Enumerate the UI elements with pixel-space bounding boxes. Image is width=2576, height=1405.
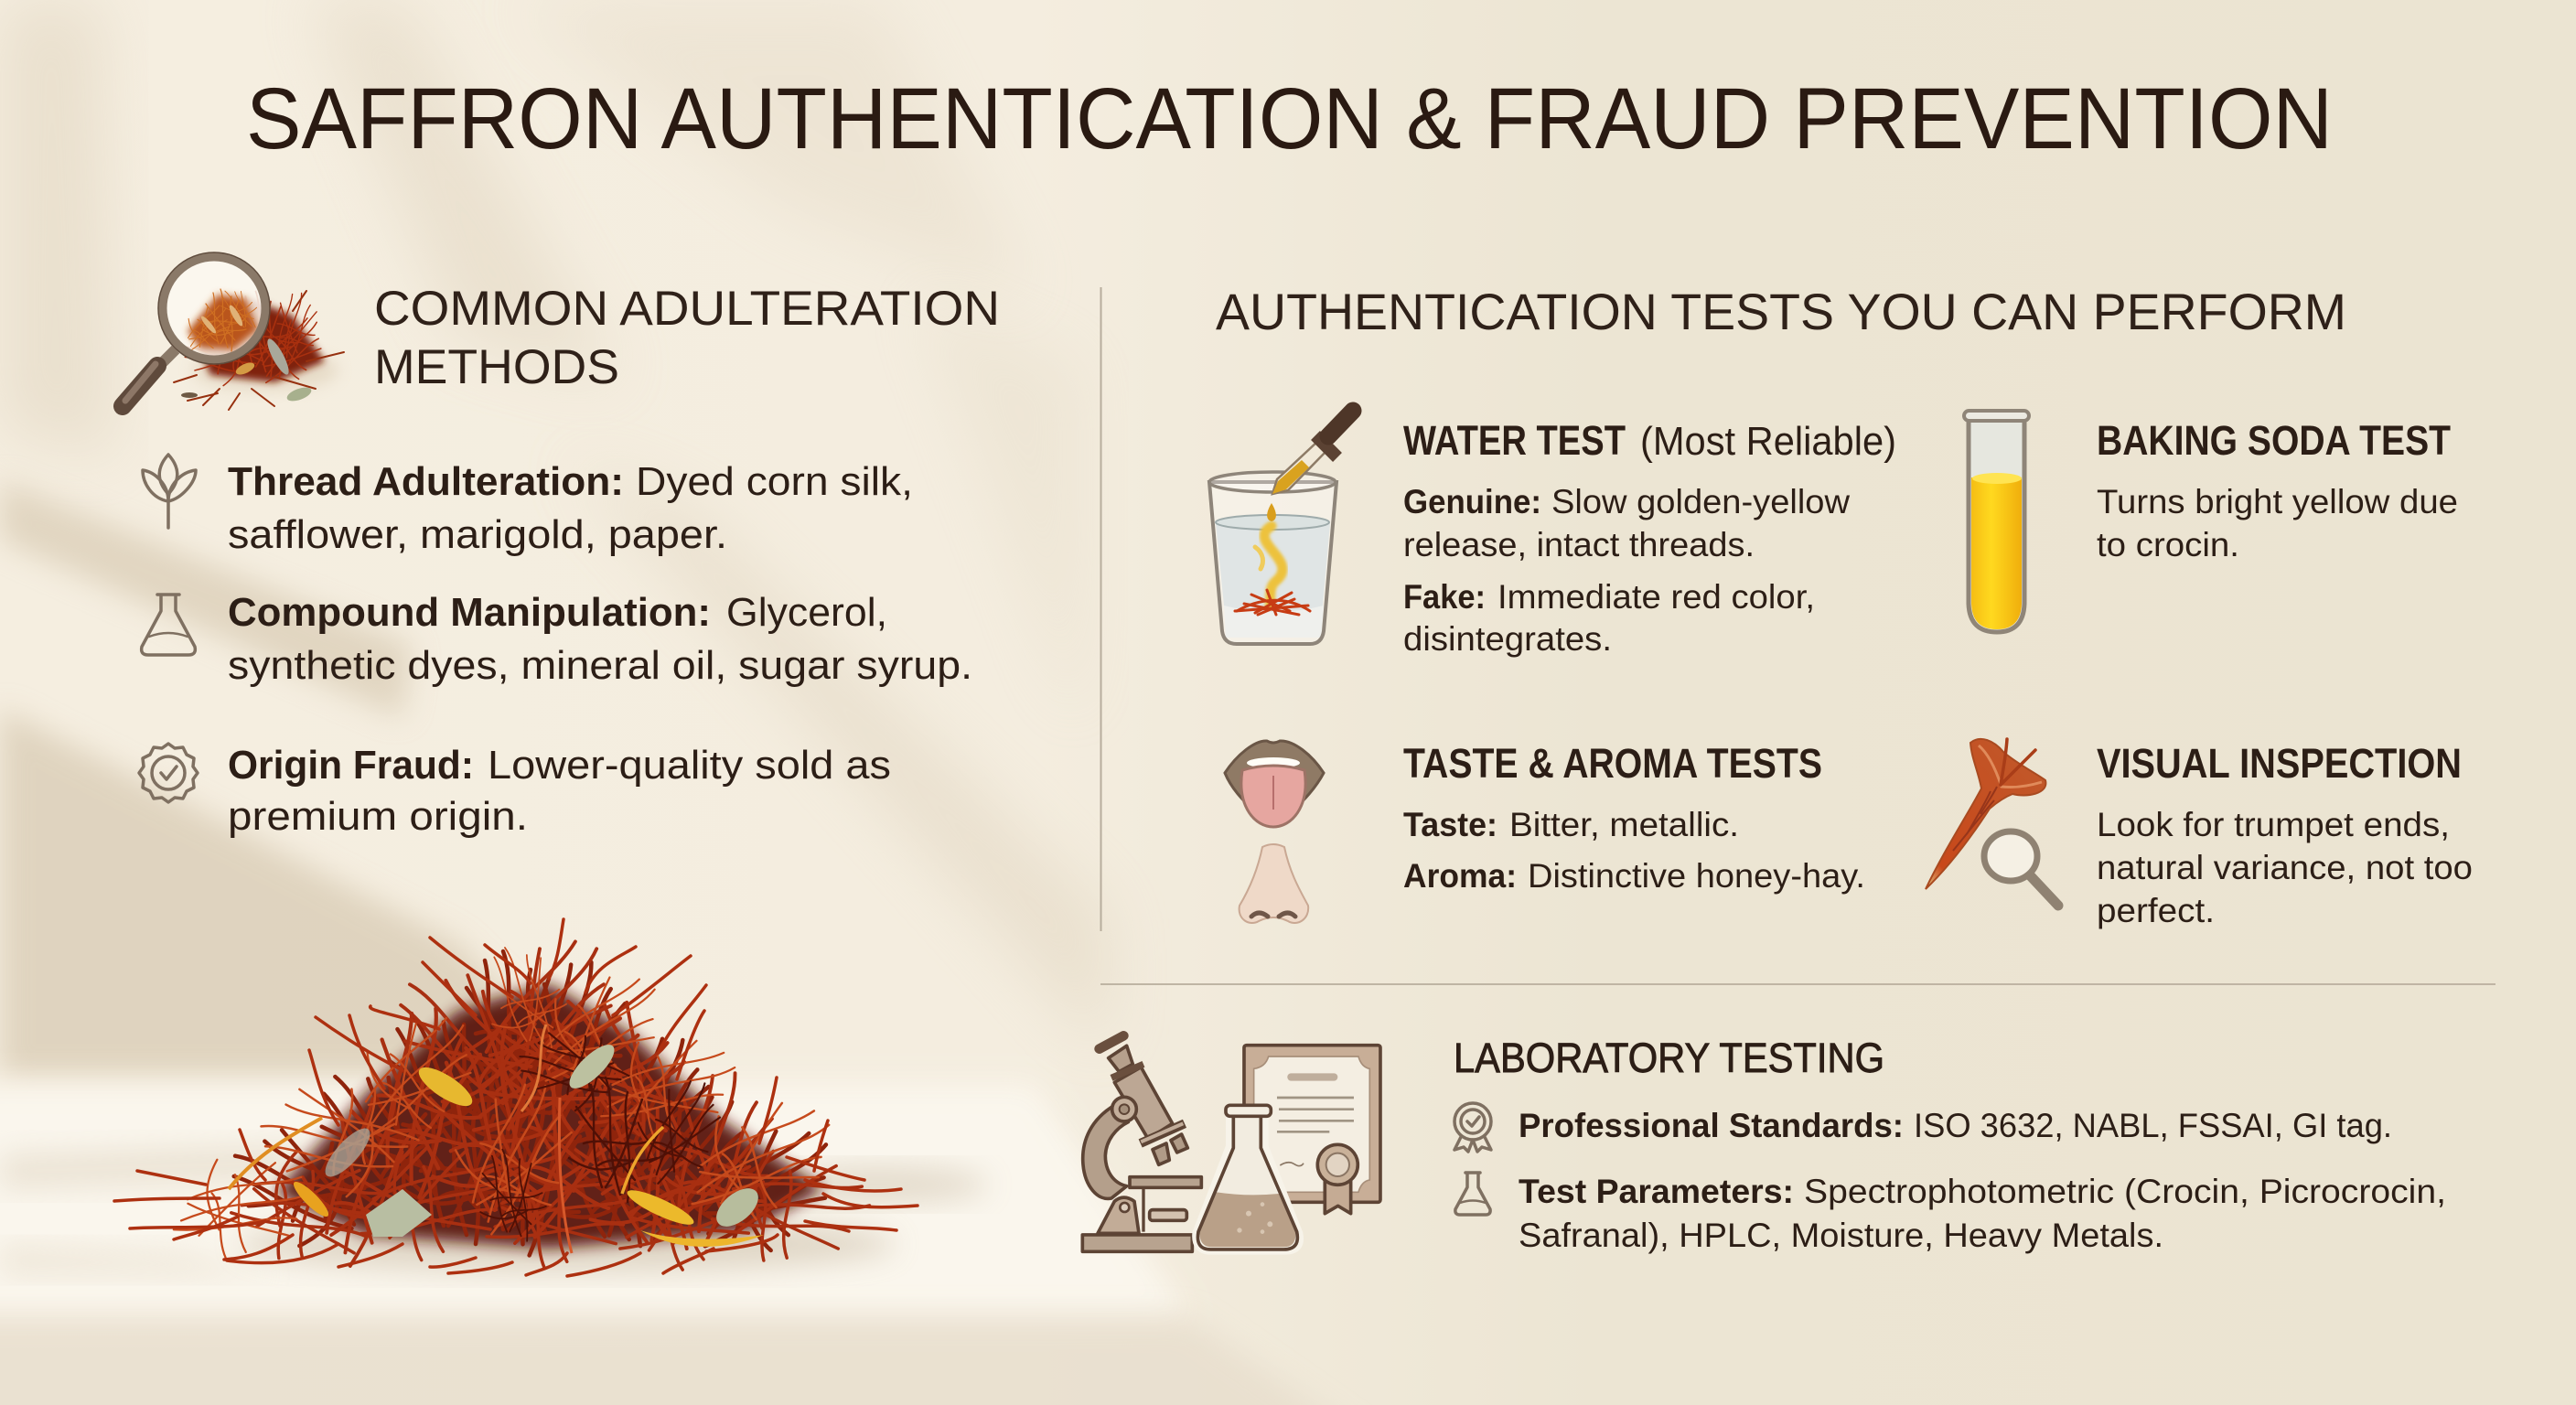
text: water test: Immediate red color, bbox=[1497, 578, 1815, 616]
text: compound manipulation: Compound Manipulation: bbox=[228, 590, 711, 635]
heading: laboratory testing: LABORATORY TESTING bbox=[1454, 1035, 1884, 1081]
text: baking soda test: to crocin. bbox=[2097, 526, 2239, 563]
text: water test: WATER TEST bbox=[1403, 417, 1626, 464]
icon: quality badge bbox=[139, 744, 198, 802]
icon: magnifying glass over saffron bbox=[123, 252, 344, 410]
heading: common adulteration methods: METHODS bbox=[374, 340, 619, 394]
text: water test: (Most Reliable) bbox=[1640, 419, 1896, 464]
text: compound manipulation: Glycerol, bbox=[726, 590, 887, 635]
heading: authentication tests: AUTHENTICATION TESTS YOU CAN PERFORM bbox=[1216, 283, 2346, 340]
text: visual inspection: VISUAL INSPECTION bbox=[2097, 740, 2462, 787]
icon: rosette bbox=[1454, 1103, 1491, 1152]
panel: authentication tests bbox=[1209, 283, 2473, 929]
text: thread adulteration: Dyed corn silk, bbox=[636, 459, 913, 504]
vertical divider bbox=[1100, 287, 1101, 931]
icon: flask bbox=[1197, 1105, 1299, 1250]
text: taste and aroma tests: Bitter, metallic. bbox=[1509, 806, 1739, 843]
text: water test: disintegrates. bbox=[1403, 620, 1612, 658]
panel: common adulteration methods bbox=[123, 252, 1000, 839]
text: water test: release, intact threads. bbox=[1403, 526, 1755, 563]
text: water test: Fake: bbox=[1403, 578, 1486, 616]
heading: common adulteration methods bbox=[374, 282, 1000, 394]
text: taste and aroma tests: Aroma: bbox=[1403, 857, 1517, 895]
text: taste and aroma tests: TASTE & AROMA TESTS bbox=[1403, 740, 1822, 787]
text: visual inspection: Look for trumpet ends, bbox=[2097, 806, 2450, 843]
icon: water glass with dropper bbox=[1209, 411, 1353, 644]
text: visual inspection bbox=[2097, 740, 2473, 929]
text: baking soda test bbox=[2097, 417, 2458, 563]
icon: mouth with tongue bbox=[1225, 741, 1324, 827]
icon: test tube bbox=[1964, 411, 2029, 632]
icon: certificate bbox=[1244, 1046, 1380, 1214]
icon: small flask bbox=[1455, 1173, 1490, 1215]
heading: common adulteration methods: COMMON ADULTERATION bbox=[374, 282, 1000, 336]
text: thread adulteration bbox=[228, 459, 913, 557]
text: origin fraud: Origin Fraud: bbox=[228, 743, 474, 788]
text: taste and aroma tests: Taste: bbox=[1403, 806, 1497, 843]
text: professional standards: ISO 3632, NABL, FSSAI, GI tag. bbox=[1914, 1107, 2392, 1144]
title: SAFFRON AUTHENTICATION & FRAUD PREVENTION bbox=[246, 70, 2333, 167]
text: test parameters: Spectrophotometric (Crocin, Picrocrocin, bbox=[1804, 1173, 2446, 1210]
text: origin fraud bbox=[228, 743, 891, 839]
text: thread adulteration: Thread Adulteration: bbox=[228, 459, 624, 504]
text: water test bbox=[1403, 417, 1896, 658]
text: baking soda test: Turns bright yellow due bbox=[2097, 483, 2458, 520]
text: origin fraud: Lower-quality sold as bbox=[488, 743, 891, 788]
text: baking soda test: BAKING SODA TEST bbox=[2097, 417, 2451, 464]
icon: flask bbox=[142, 595, 195, 655]
horizontal divider bbox=[1100, 983, 2496, 985]
text: visual inspection: natural variance, not too bbox=[2097, 849, 2473, 886]
text: taste and aroma tests bbox=[1403, 740, 1865, 895]
text: visual inspection: perfect. bbox=[2097, 892, 2215, 929]
icon: mouth and nose bbox=[1225, 741, 1324, 923]
icon: nose bbox=[1240, 844, 1308, 923]
text: test parameters: Test Parameters: bbox=[1519, 1173, 1794, 1210]
text: thread adulteration: safflower, marigold, paper. bbox=[228, 512, 727, 557]
icon: leaf sprout bbox=[143, 455, 196, 528]
text: test parameters bbox=[1519, 1173, 2446, 1254]
text: compound manipulation: synthetic dyes, mineral oil, sugar syrup. bbox=[228, 643, 972, 688]
panel: laboratory testing bbox=[1082, 1035, 2446, 1254]
illustration: saffron pile bbox=[114, 913, 988, 1284]
text: taste and aroma tests: Distinctive honey-hay. bbox=[1528, 857, 1865, 895]
text: professional standards: Professional Standards: bbox=[1519, 1107, 1904, 1144]
text: water test: Slow golden-yellow bbox=[1551, 483, 1850, 520]
text: water test: Genuine: bbox=[1403, 483, 1541, 520]
text: origin fraud: premium origin. bbox=[228, 794, 528, 839]
text: test parameters: Safranal), HPLC, Moisture, Heavy Metals. bbox=[1519, 1217, 2163, 1254]
icon: microscope, flask and certificate bbox=[1082, 1035, 1380, 1251]
icon: saffron flower and magnifier bbox=[1926, 739, 2058, 906]
text: professional standards bbox=[1519, 1107, 2392, 1144]
icon: microscope bbox=[1082, 1035, 1201, 1251]
text: compound manipulation bbox=[228, 590, 972, 688]
